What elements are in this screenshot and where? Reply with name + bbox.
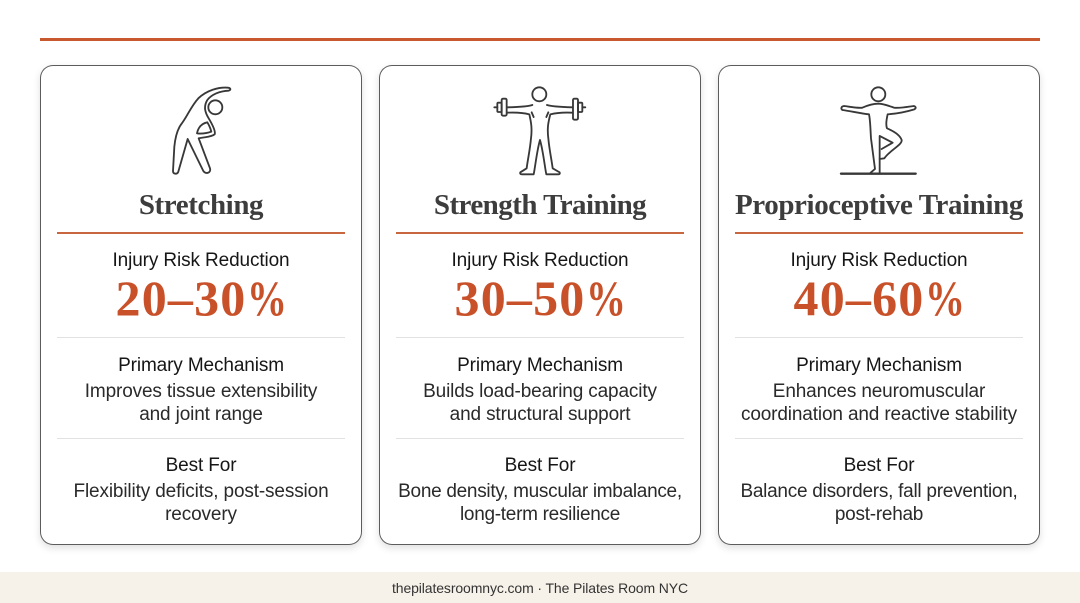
label: primary mechanism: Primary Mechanism — [796, 355, 962, 376]
top accent rule — [40, 38, 1040, 41]
panel: proprioceptive training — [718, 65, 1040, 545]
text: mechanism description: and joint range — [139, 404, 263, 425]
divider: heading — [57, 232, 345, 234]
text: mechanism description: Builds load-bearing capacity — [423, 381, 657, 402]
label: injury risk reduction: Injury Risk Reduction — [452, 250, 628, 271]
text: mechanism description — [741, 381, 1017, 425]
icon: single-leg balance figure — [840, 86, 917, 175]
text: best for description: Flexibility deficits, post-session — [74, 481, 328, 502]
text: mechanism description: Improves tissue extensibility — [85, 381, 317, 402]
text: mechanism description — [423, 381, 657, 425]
value: 30–50%: 30–50 — [454, 270, 586, 326]
heading: proprioceptive training: Proprioceptive Training — [735, 189, 1023, 221]
divider: heading — [396, 232, 684, 234]
label: injury risk reduction: Injury Risk Reduction — [112, 250, 290, 271]
text: best for description — [398, 481, 682, 525]
text: best for description: post-rehab — [835, 504, 923, 525]
panel: stretching — [40, 65, 362, 545]
value: 30–50%: % — [586, 270, 626, 326]
icon: side stretch figure — [172, 86, 232, 175]
text: mechanism description — [85, 381, 318, 425]
text: best for description: long-term resilience — [460, 504, 620, 525]
text: best for description — [74, 481, 328, 525]
label: primary mechanism: Primary Mechanism — [457, 355, 623, 376]
text: mechanism description: Enhances neuromuscular — [773, 381, 985, 402]
divider: heading — [735, 232, 1023, 234]
text: best for description: Bone density, muscular imbalance, — [398, 481, 682, 502]
text: mechanism description: and structural support — [450, 404, 630, 425]
heading: stretching: Stretching — [139, 189, 263, 221]
value: 20–30%: % — [246, 270, 286, 326]
panel: strength training — [379, 65, 701, 545]
text: mechanism description: coordination and reactive stability — [741, 404, 1017, 425]
text: best for description — [740, 481, 1018, 525]
label: best for: Best For — [844, 455, 914, 476]
text: best for description: Balance disorders, fall prevention, — [740, 481, 1018, 502]
icon: figure lifting barbell — [493, 86, 586, 176]
heading: strength training: Strength Training — [434, 189, 646, 221]
value: 20–30%: 20–30 — [116, 270, 246, 326]
label: injury risk reduction: Injury Risk Reduction — [790, 250, 968, 271]
label: best for: Best For — [505, 455, 575, 476]
label: best for: Best For — [166, 455, 236, 476]
value: 40–60%: % — [924, 270, 964, 326]
text: best for description: recovery — [165, 504, 237, 525]
value: 40–60%: 40–60 — [794, 270, 924, 326]
footer text: thepilatesroomnyc.com · The Pilates Room NYC — [392, 580, 688, 596]
label: primary mechanism: Primary Mechanism — [118, 355, 284, 376]
footer band — [0, 572, 1080, 603]
